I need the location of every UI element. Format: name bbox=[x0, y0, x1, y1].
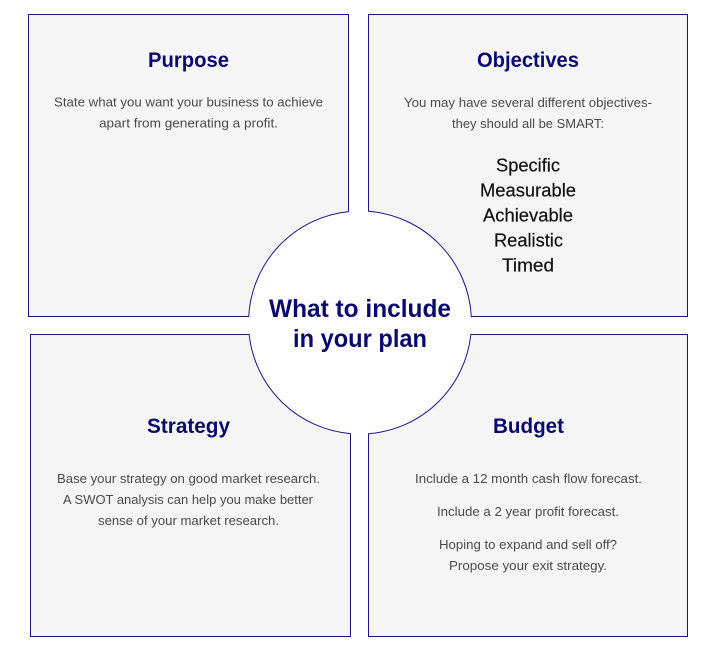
list: SMART criteria: Realistic bbox=[494, 230, 563, 250]
panel: strategy bbox=[30, 334, 350, 636]
text block: strategy: A SWOT analysis can help you make better bbox=[63, 492, 314, 507]
central title: in your plan bbox=[293, 325, 427, 353]
text block: strategy: Base your strategy on good market research. bbox=[57, 471, 320, 486]
text block: strategy: sense of your market research. bbox=[98, 513, 279, 528]
heading: objectives: Objectives bbox=[477, 49, 579, 72]
text block: purpose bbox=[54, 94, 323, 130]
text block: strategy bbox=[57, 471, 320, 528]
central title: What to include bbox=[269, 295, 451, 323]
panel: objectives bbox=[368, 14, 688, 316]
text block: budget bbox=[415, 471, 642, 573]
text block: purpose: apart from generating a profit. bbox=[99, 116, 278, 130]
list: SMART criteria: Specific bbox=[496, 156, 560, 176]
heading: purpose: Purpose bbox=[148, 49, 229, 72]
list: SMART criteria: Achievable bbox=[483, 206, 573, 226]
heading: budget: Budget bbox=[493, 415, 564, 438]
text block: budget: Propose your exit strategy. bbox=[449, 558, 607, 573]
text block: objectives intro: You may have several different objectives- bbox=[404, 95, 652, 110]
text block: budget: Hoping to expand and sell off? bbox=[439, 537, 617, 552]
central title bbox=[269, 295, 451, 353]
text block: objectives intro bbox=[404, 95, 652, 131]
list: SMART criteria: Measurable bbox=[480, 180, 576, 200]
text block: budget: Include a 2 year profit forecast. bbox=[437, 504, 619, 519]
text block: objectives intro: they should all be SMART: bbox=[452, 116, 604, 131]
list: SMART criteria: Timed bbox=[502, 256, 554, 276]
list: SMART criteria bbox=[480, 156, 576, 276]
text block: budget: Include a 12 month cash flow forecast. bbox=[415, 471, 642, 486]
text block: purpose: State what you want your business to achieve bbox=[54, 94, 323, 110]
panel: budget bbox=[368, 334, 688, 636]
heading: strategy: Strategy bbox=[147, 415, 230, 438]
panel: purpose bbox=[28, 14, 348, 316]
